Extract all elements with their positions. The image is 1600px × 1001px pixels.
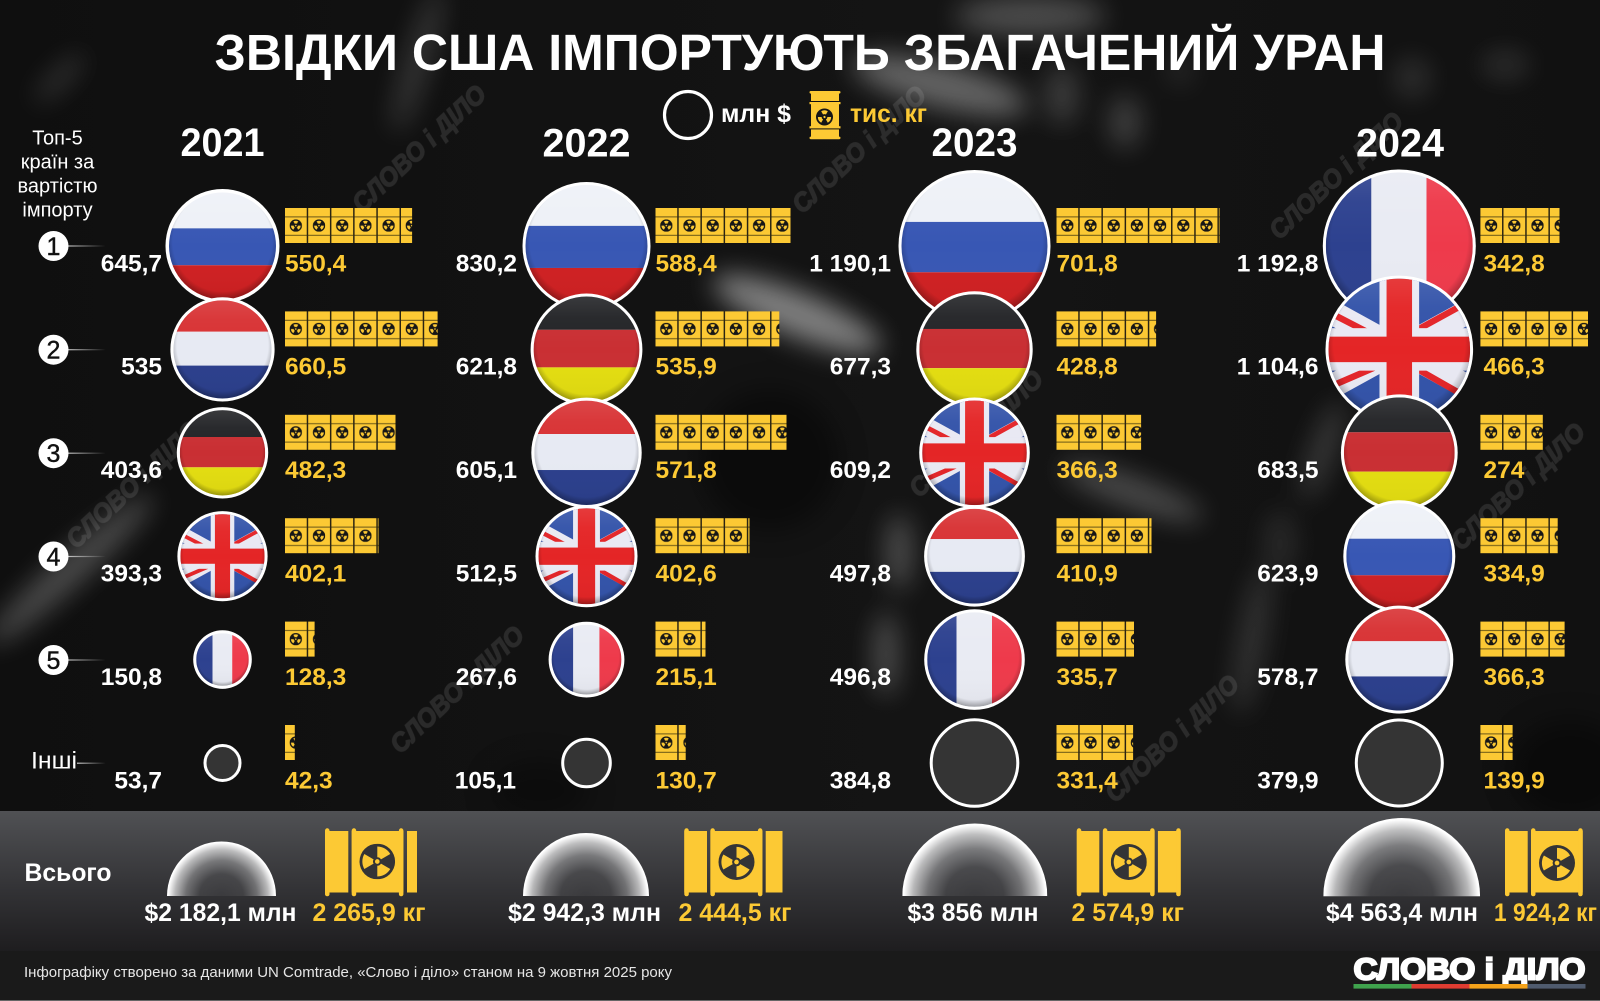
rank 4 xyxy=(38,542,106,572)
2021 row 1: Russia: 645,7 xyxy=(101,250,162,278)
2022 row 5: France xyxy=(456,622,717,697)
2021 row 1: Russia xyxy=(101,189,412,303)
2021 row 5: France: 150,8 xyxy=(101,664,162,691)
column: 2022 xyxy=(455,122,790,794)
total 2023 xyxy=(902,824,1184,927)
column: 2024 xyxy=(1237,122,1588,806)
2023 row 1: Russia xyxy=(809,170,1220,322)
background: СЛОВО і ДІЛО xyxy=(60,415,206,554)
2023 row 3: United Kingdom: 609,2 xyxy=(830,457,891,484)
2022 row 6: others: 105,1 xyxy=(455,767,516,794)
heading: top-5 countries by import value: країн за xyxy=(21,152,95,174)
2021 row 3: Germany: 482,3 xyxy=(285,457,346,484)
background: СЛОВО і ДІЛО xyxy=(1099,669,1245,808)
2022 row 6: others: 130,7 xyxy=(656,767,717,794)
2022 row 3: Netherlands: 605,1 xyxy=(456,457,517,484)
total 2022 xyxy=(508,828,792,927)
2023 row 4: Netherlands: 410,9 xyxy=(1056,560,1118,588)
2022 row 2: Germany: 621,8 xyxy=(456,354,517,381)
2023 row 1: Russia: 1 190,1 xyxy=(809,250,891,278)
year 2022: 2022 xyxy=(542,122,630,166)
2024 row 1: France: 342,8 xyxy=(1484,250,1545,278)
2023 row 6: others xyxy=(830,720,1133,806)
rank 2: 2 xyxy=(47,337,60,365)
total 2024 xyxy=(1323,818,1597,927)
2024 row 4: Russia: 334,9 xyxy=(1484,560,1545,588)
2023 row 6: others: 331,4 xyxy=(1056,767,1118,794)
2022 row 2: Germany xyxy=(456,294,779,405)
2022 row 2: Germany: 535,9 xyxy=(656,354,717,381)
2024 row 6: others: 379,9 xyxy=(1257,767,1318,794)
2024 row 2: United Kingdom: 1 104,6 xyxy=(1237,354,1318,381)
background: СЛОВО і ДІЛО xyxy=(384,620,530,759)
rank 1 xyxy=(38,231,106,261)
2022 row 4: United Kingdom xyxy=(456,505,750,607)
2024 row 1: France: 1 192,8 xyxy=(1237,250,1318,278)
2023 row 3: United Kingdom: 366,3 xyxy=(1056,457,1118,484)
totals band xyxy=(0,811,1600,952)
total 2022: 2 444,5 кг xyxy=(678,899,792,927)
2023 row 5: France: 335,7 xyxy=(1056,664,1118,691)
background: СЛОВО і ДІЛО xyxy=(1445,417,1591,556)
rank 1: 1 xyxy=(47,233,60,261)
2023 row 4: Netherlands xyxy=(830,506,1152,607)
2023 row 1: Russia: 701,8 xyxy=(1056,250,1118,278)
others label: Інші xyxy=(31,748,77,774)
others label xyxy=(31,748,106,774)
2021 row 4: United Kingdom xyxy=(101,511,378,601)
2021 row 4: United Kingdom: 393,3 xyxy=(101,560,162,588)
heading: top-5 countries by import value: Топ-5 xyxy=(32,128,83,150)
heading: top-5 countries by import value: імпорту xyxy=(22,200,93,222)
2023 row 4: Netherlands: 497,8 xyxy=(830,560,891,588)
2024 row 5: Netherlands xyxy=(1257,606,1565,714)
2023 row 2: Germany: 677,3 xyxy=(830,354,891,381)
rank 5 xyxy=(38,645,106,675)
legend xyxy=(664,91,927,139)
rank 2 xyxy=(38,335,106,365)
2022 row 3: Netherlands: 571,8 xyxy=(656,457,717,484)
legend: circle = million dollars xyxy=(664,92,791,138)
2024 row 3: Germany: 683,5 xyxy=(1257,457,1318,484)
total 2021 xyxy=(144,828,426,927)
2024 row 2: United Kingdom xyxy=(1237,276,1588,423)
2023 row 3: United Kingdom xyxy=(830,398,1141,508)
2022 row 1: Russia: 588,4 xyxy=(656,250,717,278)
title: ЗВІДКИ США ІМПОРТУЮТЬ ЗБАГАЧЕНИЙ УРАН xyxy=(214,23,1386,81)
2024 row 3: Germany: 274 xyxy=(1484,457,1525,484)
2022 row 1: Russia: 830,2 xyxy=(456,250,517,278)
total 2023: 2 574,9 кг xyxy=(1072,899,1184,927)
total 2021: 2 265,9 кг xyxy=(312,899,426,927)
2021 row 4: United Kingdom: 402,1 xyxy=(285,560,346,588)
2024 row 2: United Kingdom: 466,3 xyxy=(1484,354,1545,381)
source note: Інфографіку створено за даними UN Comtrade, «Слово і діло» станом на 9 жовтня 2025 року xyxy=(24,964,672,981)
2023 row 5: France xyxy=(830,609,1134,710)
column: 2023 xyxy=(809,121,1220,806)
2022 row 4: United Kingdom: 512,5 xyxy=(456,560,517,588)
2022 row 4: United Kingdom: 402,6 xyxy=(656,560,717,588)
rank 3: 3 xyxy=(47,440,60,468)
2021 row 6: others: 42,3 xyxy=(285,767,333,794)
2023 row 2: Germany: 428,8 xyxy=(1056,354,1118,381)
2022 row 6: others xyxy=(455,725,717,794)
legend: circle = million dollars: млн $ xyxy=(721,100,791,128)
rank labels xyxy=(31,231,106,774)
2022 row 5: France: 267,6 xyxy=(456,664,517,691)
2021 row 5: France: 128,3 xyxy=(285,664,346,691)
2024 row 6: others: 139,9 xyxy=(1484,767,1545,794)
column: 2021 xyxy=(101,121,438,794)
2024 row 5: Netherlands: 578,7 xyxy=(1257,664,1318,691)
background: СЛОВО і ДІЛО xyxy=(1263,106,1409,245)
total 2024: $4 563,4 млн xyxy=(1326,899,1478,927)
total 2021: $2 182,1 млн xyxy=(144,899,296,927)
2021 row 6: others: 53,7 xyxy=(114,767,162,794)
2023 row 2: Germany xyxy=(830,291,1156,408)
background: СЛОВО і ДІЛО xyxy=(903,364,1049,503)
rank 3 xyxy=(38,438,106,468)
2024 row 1: France xyxy=(1237,170,1560,322)
logo: СЛОВО і ДІЛО xyxy=(1354,952,1586,986)
2023 row 5: France: 496,8 xyxy=(830,664,891,691)
rank 5: 5 xyxy=(47,647,60,675)
2021 row 2: Netherlands xyxy=(121,297,438,402)
total 2023: $3 856 млн xyxy=(908,899,1038,927)
year 2023: 2023 xyxy=(932,121,1018,165)
background: СЛОВО і ДІЛО xyxy=(786,80,932,219)
heading: top-5 countries by import value: вартістю xyxy=(18,176,97,198)
legend: barrel = thousand kg xyxy=(810,91,927,139)
2022 row 3: Netherlands xyxy=(456,398,786,508)
2024 row 3: Germany xyxy=(1257,394,1543,511)
2024 row 4: Russia xyxy=(1257,500,1558,612)
rank 4: 4 xyxy=(47,544,61,572)
2021 row 1: Russia: 550,4 xyxy=(285,250,347,278)
totals heading: Всього xyxy=(24,859,112,887)
year 2021: 2021 xyxy=(180,121,264,165)
footer xyxy=(0,951,1600,1001)
2023 row 6: others: 384,8 xyxy=(830,767,891,794)
total 2022: $2 942,3 млн xyxy=(508,899,661,927)
2022 row 1: Russia xyxy=(456,182,790,310)
background: СЛОВО і ДІЛО xyxy=(346,79,492,218)
2024 row 6: others xyxy=(1257,720,1545,806)
2021 row 5: France xyxy=(101,622,346,691)
2021 row 2: Netherlands: 660,5 xyxy=(285,354,346,381)
2021 row 2: Netherlands: 535 xyxy=(121,354,162,381)
2022 row 5: France: 215,1 xyxy=(656,664,717,691)
year 2024: 2024 xyxy=(1356,122,1445,166)
2024 row 4: Russia: 623,9 xyxy=(1257,560,1318,588)
2024 row 5: Netherlands: 366,3 xyxy=(1484,664,1545,691)
2021 row 3: Germany xyxy=(101,407,396,498)
2021 row 6: others xyxy=(114,725,333,794)
legend: barrel = thousand kg: тис. кг xyxy=(850,100,927,128)
2021 row 3: Germany: 403,6 xyxy=(101,457,162,484)
